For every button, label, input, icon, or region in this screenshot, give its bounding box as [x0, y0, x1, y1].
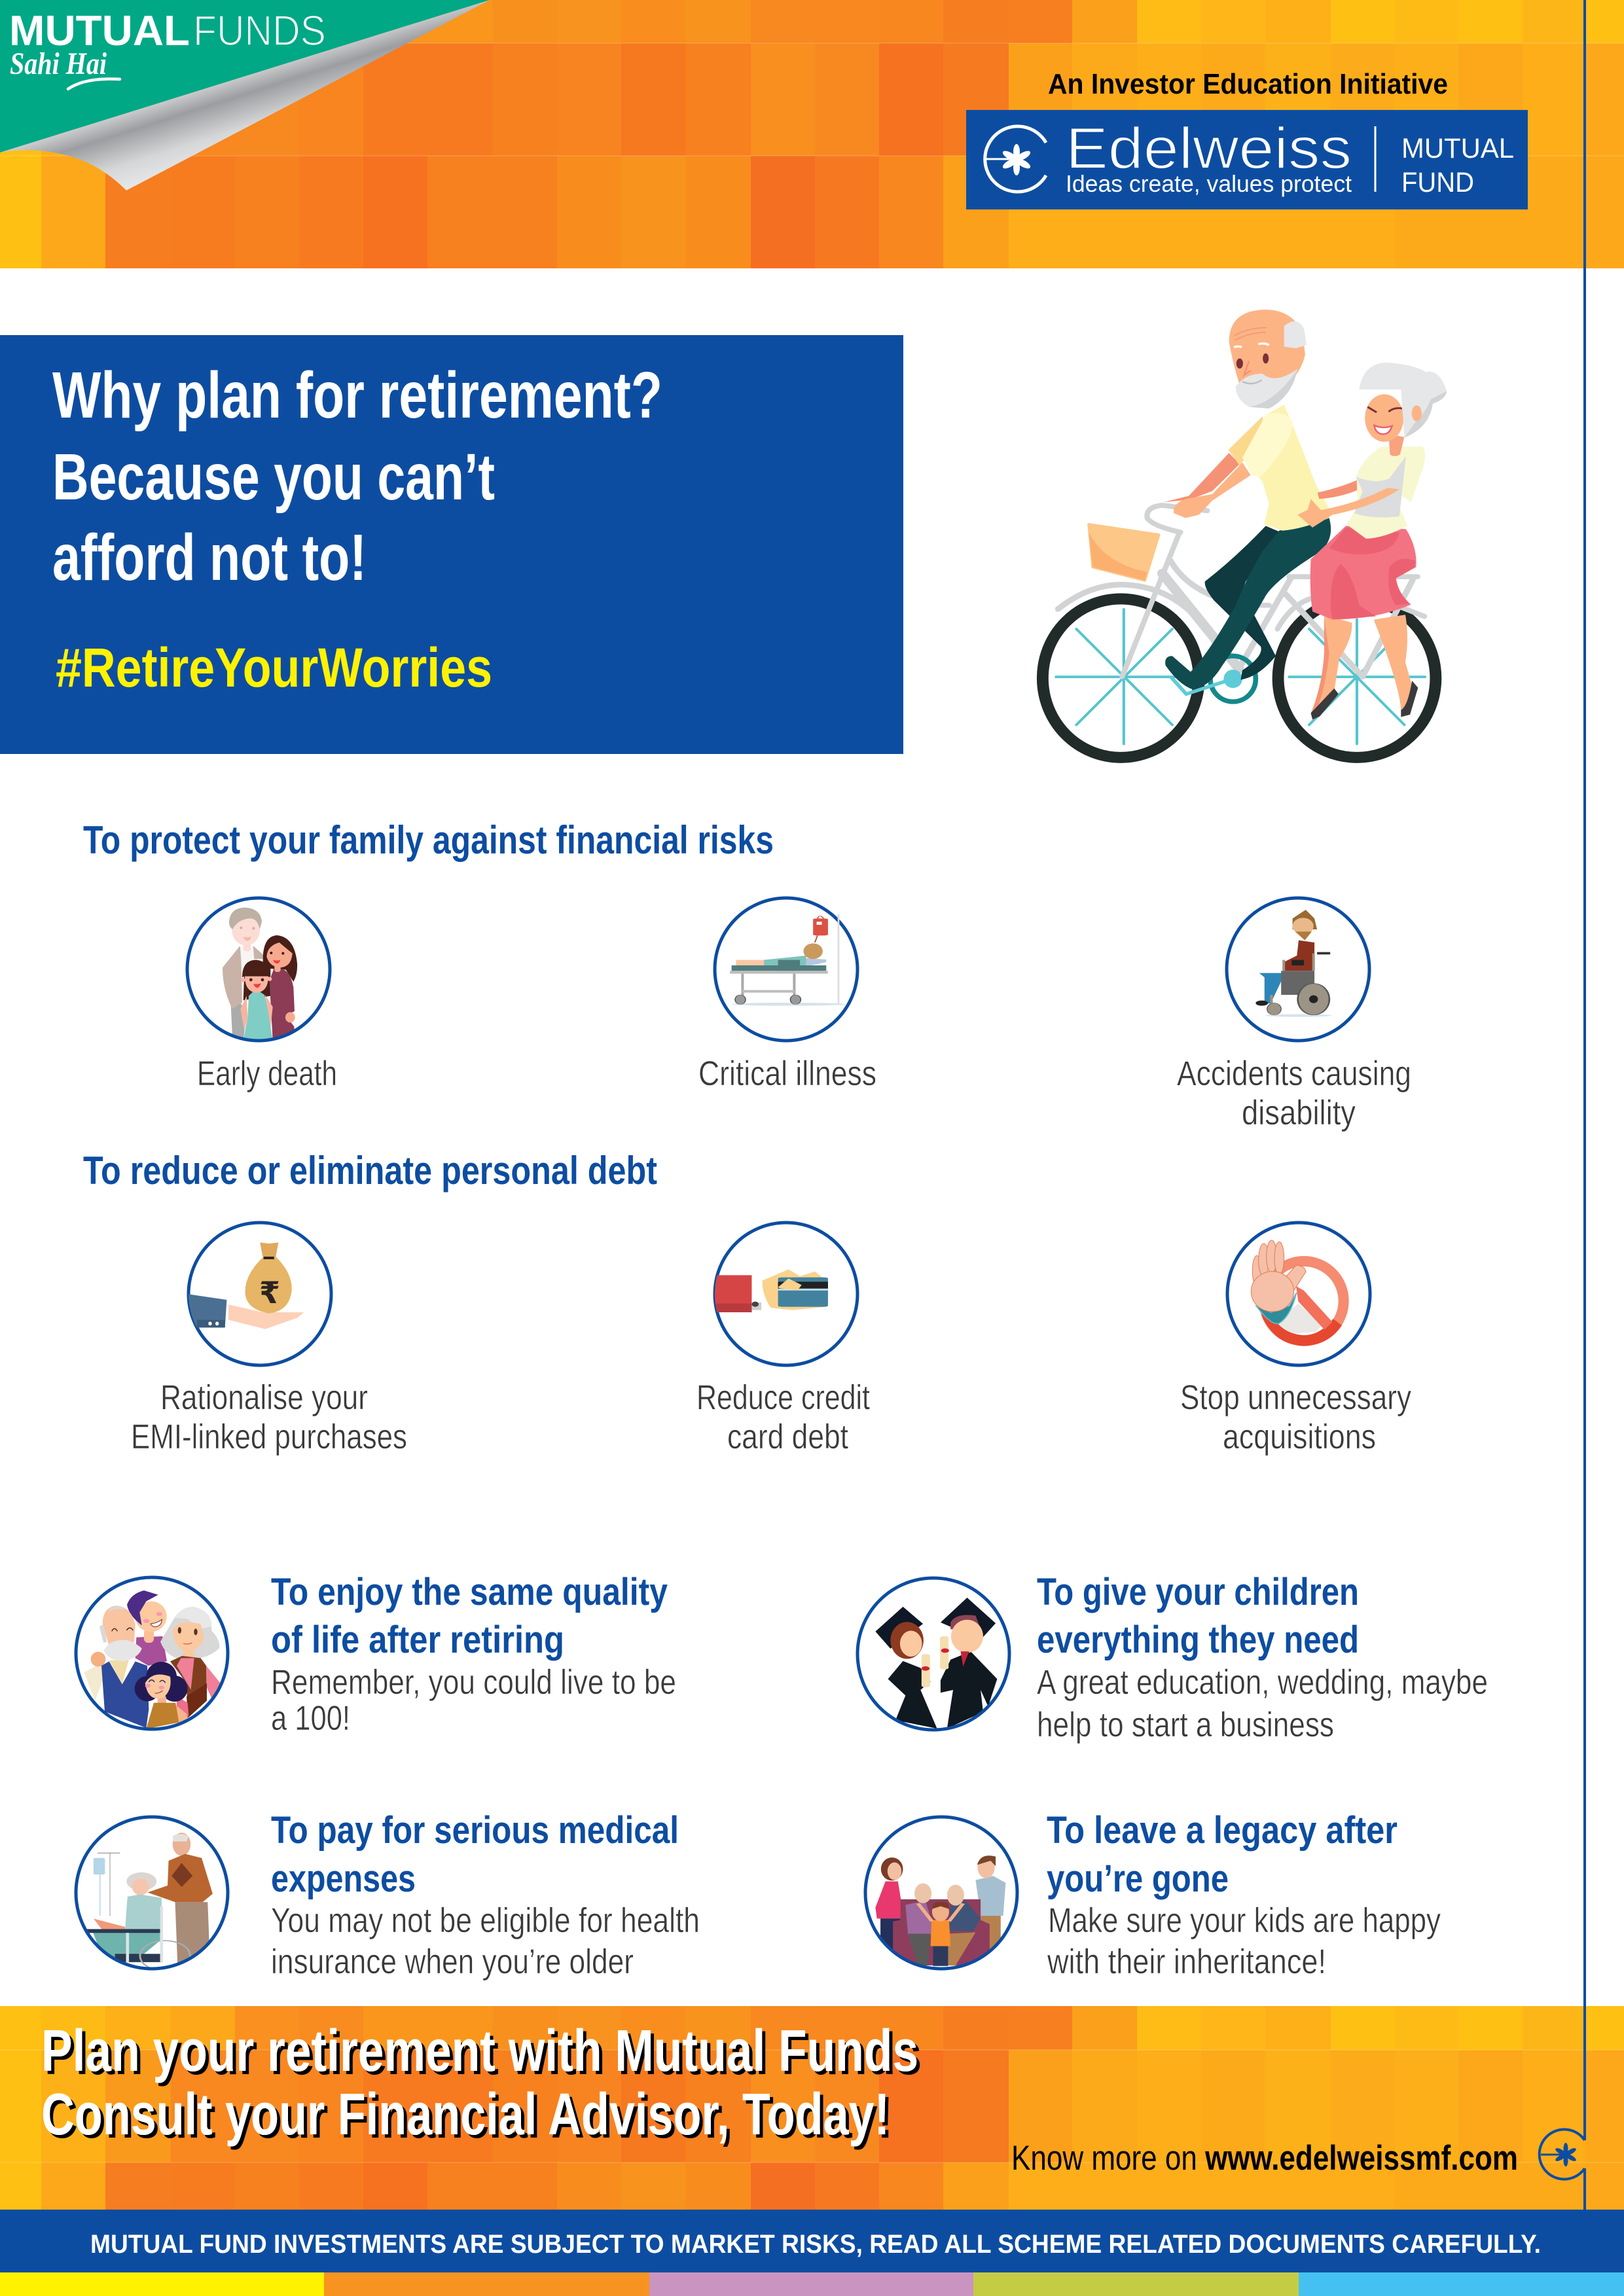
heading: To leave a legacy after	[1047, 1809, 1398, 1852]
item: Stop unnecessary acquisitions	[1180, 1223, 1411, 1456]
icon: graduates	[857, 1578, 1009, 1730]
description	[1037, 1663, 1488, 1744]
page curl with Mutual Funds Sahi Hai logo	[0, 0, 490, 190]
heading: To enjoy the same quality	[271, 1571, 668, 1613]
title line 3: afford not to!	[52, 521, 367, 594]
icon: footer Edelweiss mark	[1540, 2130, 1585, 2179]
label	[131, 1378, 407, 1456]
label: Stop unnecessary	[1180, 1378, 1411, 1417]
icon: money bag on hand	[188, 1223, 331, 1365]
icon: family on sofa	[865, 1817, 1017, 1969]
description: help to start a business	[1037, 1706, 1334, 1744]
header band	[0, 0, 1624, 268]
heading	[1037, 1571, 1359, 1661]
description: with their inheritance!	[1047, 1943, 1326, 1981]
item: Critical illness	[698, 898, 876, 1093]
title line 1: Why plan for retirement?	[52, 359, 662, 432]
call to action: Consult your Financial Advisor, Today!	[41, 2082, 890, 2147]
description: a 100!	[271, 1699, 350, 1738]
call to action: Plan your retirement with Mutual Funds	[41, 2018, 918, 2084]
website link: Know more on www.edelweissmf.com	[1011, 2139, 1518, 2178]
man	[1164, 310, 1331, 689]
text: FUND: FUND	[1401, 167, 1474, 198]
heading: of life after retiring	[271, 1619, 564, 1661]
vertical blue rule	[1583, 0, 1586, 2210]
description: Remember, you could live to be	[271, 1663, 676, 1702]
icon: man pushing woman in wheelchair	[76, 1817, 228, 1971]
disclaimer bar	[0, 2210, 1624, 2272]
icon: man in wheelchair	[1227, 898, 1369, 1041]
title line 2: Because you can’t	[52, 440, 495, 514]
description: insurance when you’re older	[271, 1943, 634, 1981]
heading: everything they need	[1037, 1619, 1359, 1661]
heading	[271, 1809, 679, 1900]
hashtag: #RetireYourWorries	[56, 637, 492, 698]
icon: hand holding card	[714, 1223, 857, 1365]
description: Make sure your kids are happy	[1048, 1901, 1441, 1940]
item: Early death	[187, 898, 337, 1093]
woman	[1297, 363, 1447, 719]
section heading: protect family: To protect your family against financial risks	[83, 818, 774, 862]
text: MUTUALFUNDS	[9, 7, 326, 54]
item: Accidents causing disability	[1177, 898, 1411, 1132]
heading: To pay for serious medical	[271, 1809, 679, 1852]
call to action	[41, 2018, 918, 2147]
heading: To give your children	[1037, 1571, 1359, 1613]
text: tagline: Ideas create, values protect	[1066, 170, 1352, 197]
label: Early death	[197, 1054, 337, 1093]
item: Reduce credit card debt	[696, 1223, 870, 1456]
text: MUTUALFUNDS: MUTUAL	[9, 7, 190, 54]
item: Rationalise EMI purchases	[131, 1223, 407, 1456]
description	[1047, 1901, 1441, 1981]
label: EMI-linked purchases	[131, 1418, 407, 1456]
label	[696, 1378, 870, 1456]
illustration: elderly couple on a bicycle	[1043, 310, 1447, 757]
description: You may not be eligible for health	[271, 1901, 700, 1940]
item: serious medical expenses	[76, 1809, 700, 1981]
section heading: reduce debt: To reduce or eliminate personal debt	[83, 1149, 657, 1193]
text: MUTUAL: MUTUAL	[1401, 133, 1514, 164]
icon: stop hand with prohibition sign	[1227, 1223, 1370, 1365]
icon: patient on stretcher	[715, 898, 857, 1041]
bicycle frame	[1058, 505, 1424, 677]
Edelweiss Mutual Fund logo	[966, 110, 1528, 209]
description: A great education, wedding, maybe	[1037, 1663, 1488, 1702]
text: An Investor Education Initiative: An Investor Education Initiative	[1048, 68, 1448, 100]
basket	[1089, 524, 1159, 581]
colour strip	[0, 2272, 1624, 2296]
heading: expenses	[271, 1857, 416, 1900]
text: Edelweiss: Edelweiss	[1066, 115, 1352, 181]
item: same quality of life	[76, 1571, 676, 1738]
item: leave a legacy	[865, 1809, 1441, 1981]
wheels	[1043, 599, 1435, 757]
text: Sahi Hai: Sahi Hai	[10, 46, 107, 81]
label: Rationalise your	[160, 1378, 368, 1417]
footer band	[0, 2006, 1624, 2210]
label	[1177, 1054, 1411, 1132]
label: Reduce credit	[696, 1378, 870, 1417]
label: Critical illness	[698, 1054, 876, 1093]
label: Accidents causing	[1177, 1054, 1411, 1093]
heading	[1047, 1809, 1398, 1900]
disclaimer bar: MUTUAL FUND INVESTMENTS ARE SUBJECT TO MARKET RISKS, READ ALL SCHEME RELATED DOCUMENTS CAREFULLY.	[90, 2230, 1541, 2259]
icon: smiling family	[76, 1577, 228, 1729]
label: acquisitions	[1223, 1418, 1376, 1456]
heading: you’re gone	[1047, 1857, 1229, 1900]
symbol: rupee: ₹	[259, 1275, 280, 1310]
icon: family	[187, 898, 330, 1041]
heading	[271, 1571, 668, 1661]
pedal and chain ring	[1170, 656, 1255, 702]
text: MUTUALFUNDS: FUNDS	[193, 7, 326, 54]
label: card debt	[727, 1418, 848, 1456]
description	[271, 1901, 700, 1981]
label	[1180, 1378, 1411, 1456]
label: disability	[1242, 1094, 1356, 1132]
item: give children everything	[857, 1571, 1488, 1744]
panel: title	[0, 335, 903, 754]
description	[271, 1663, 676, 1738]
swoosh	[68, 79, 120, 89]
icon: Edelweiss flower	[984, 126, 1046, 192]
